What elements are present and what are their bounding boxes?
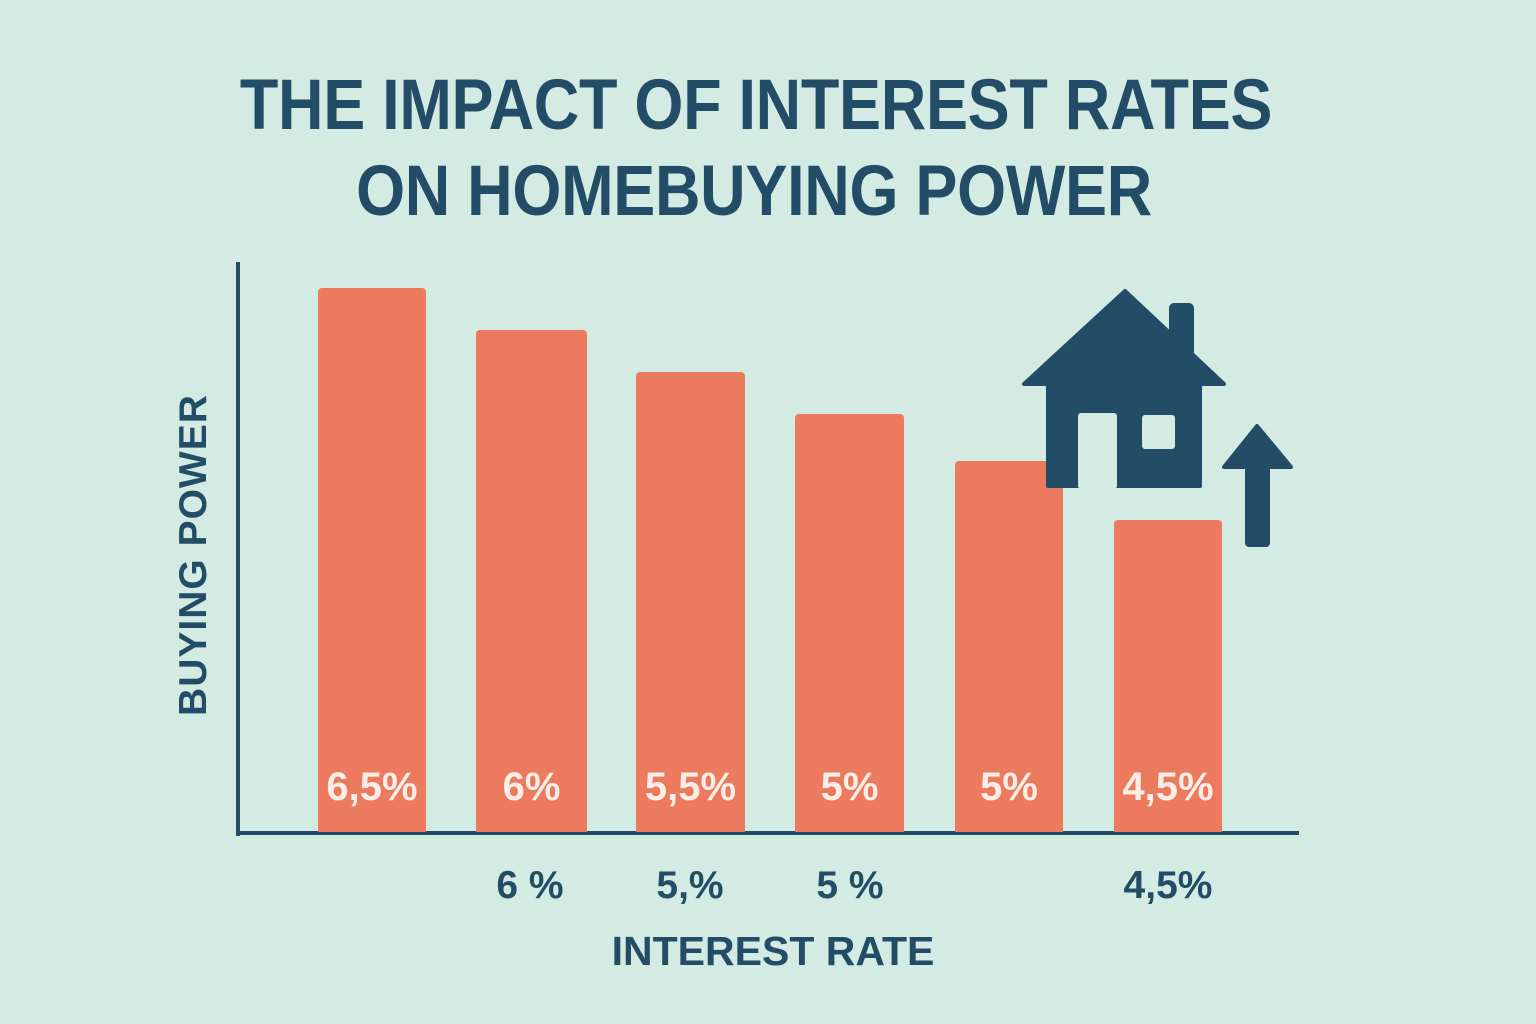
x tick labels: 5 % (816, 864, 884, 907)
bar: 6%: 6% (503, 765, 560, 809)
bar: 6% (476, 330, 587, 832)
axes (236, 262, 240, 836)
bar: 5% (795, 414, 904, 832)
bar: 5,5% (636, 372, 745, 832)
bar: 6,5% (318, 288, 426, 832)
x tick labels (496, 864, 1212, 907)
bar: 5% (second) (955, 461, 1063, 832)
bar: 4,5% (1114, 520, 1222, 832)
bar: 5%: 5% (821, 765, 878, 809)
x tick labels: 4,5% (1124, 864, 1212, 907)
title (240, 65, 1272, 231)
bar: 5% (second): 5% (980, 765, 1038, 809)
y-axis label: BUYING POWER (172, 394, 215, 716)
x tick labels: 6 % (496, 864, 564, 907)
title: ON HOMEBUYING POWER (356, 151, 1152, 231)
x-axis label: INTEREST RATE (612, 928, 934, 974)
x tick labels: 5,% (656, 864, 724, 907)
bar: 5,5%: 5,5% (645, 765, 736, 809)
title: THE IMPACT OF INTEREST RATES (240, 65, 1272, 145)
bar: 4,5%: 4,5% (1122, 765, 1214, 809)
bar: 6,5%: 6,5% (326, 765, 418, 809)
